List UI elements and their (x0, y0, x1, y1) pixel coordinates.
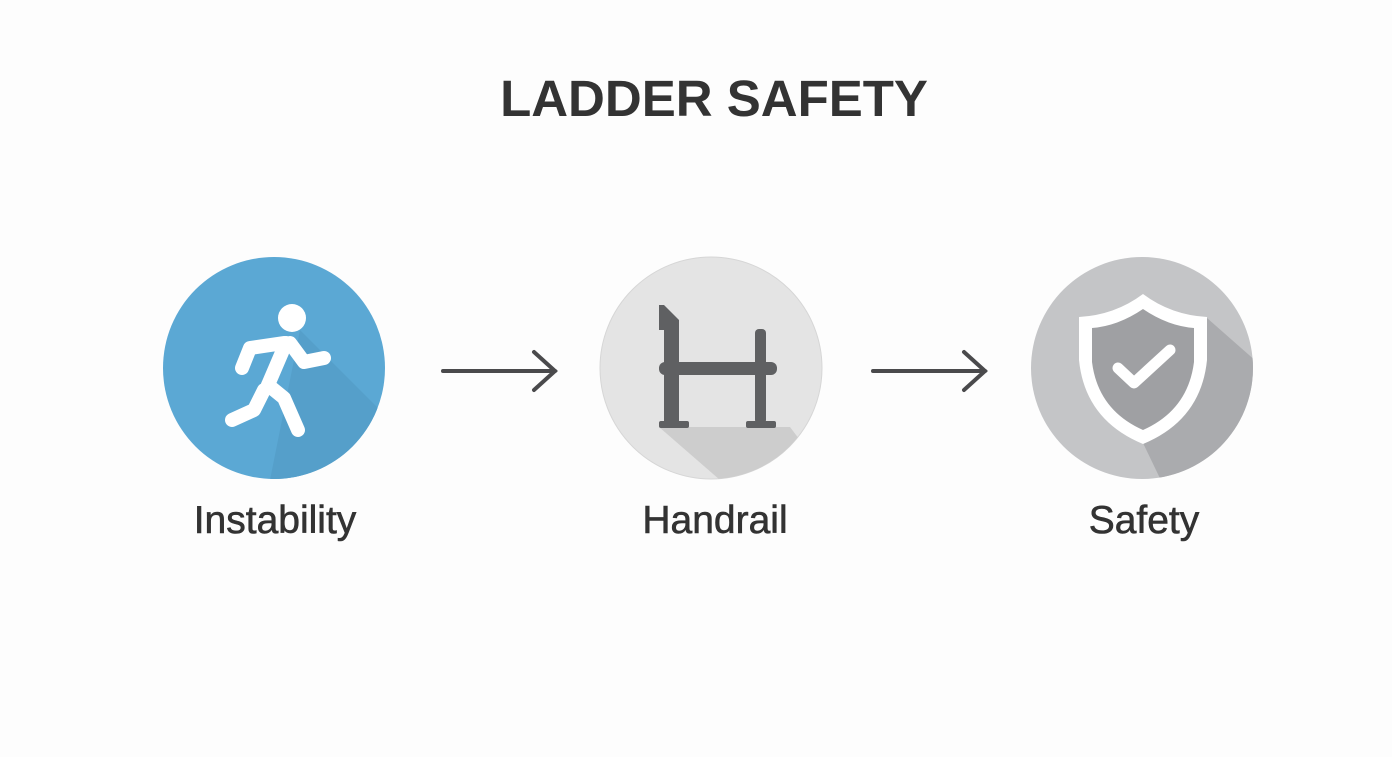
step: safety (1031, 257, 1253, 479)
step: instability (163, 257, 400, 480)
title: LADDER SAFETY (500, 70, 928, 127)
label: safety: Safety (1089, 499, 1200, 542)
arrow 2 (873, 352, 985, 390)
label: handrail: Handrail (642, 499, 788, 542)
arrow 1 (443, 352, 555, 390)
step: handrail (600, 257, 830, 480)
icon: handrail (659, 305, 777, 428)
icon: shield with check (1079, 294, 1207, 444)
icon: running person (232, 304, 324, 430)
label: instability: Instability (194, 499, 357, 542)
